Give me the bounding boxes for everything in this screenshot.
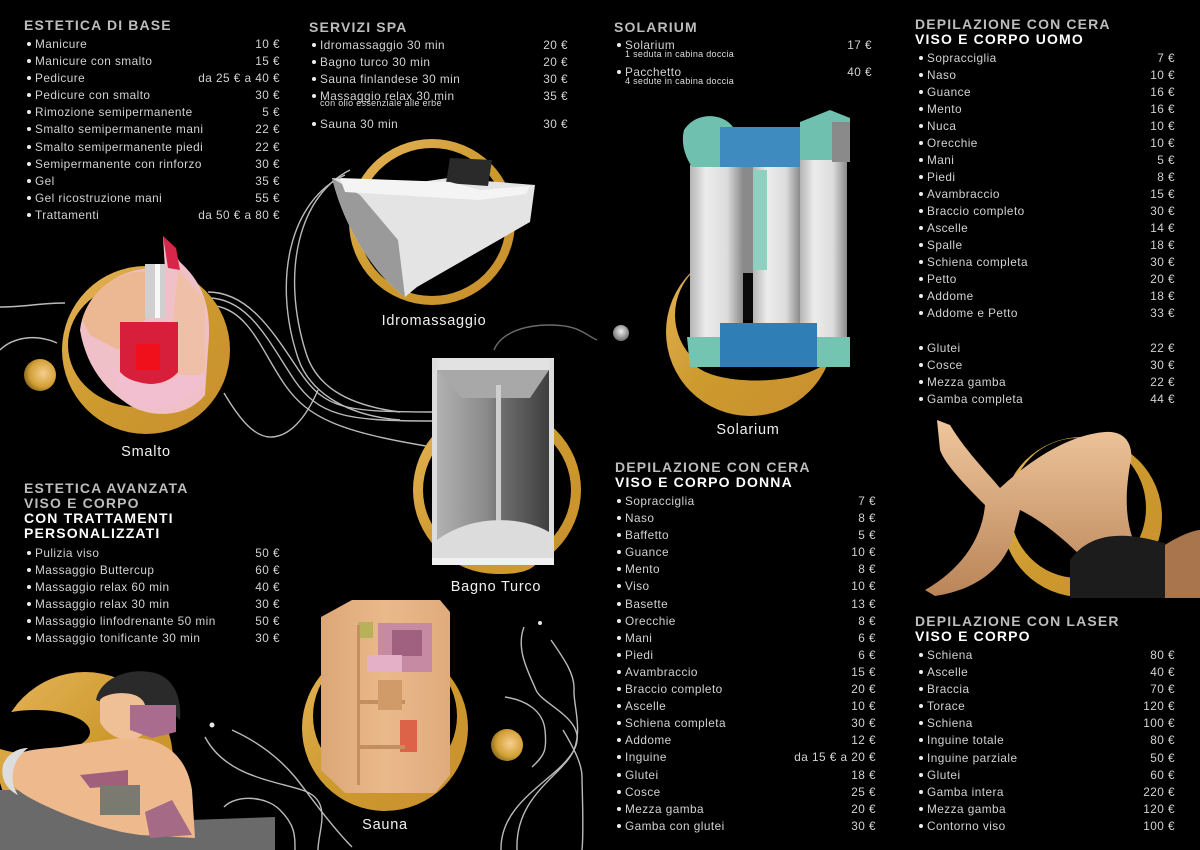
price list: depilazione laser: Schiena (927, 648, 973, 662)
price list: depilazione laser (919, 648, 1175, 833)
price list: depilazione donna: 10 € (851, 545, 876, 559)
price list: servizi spa (312, 38, 568, 131)
price list: depilazione donna: 5 € (858, 528, 876, 542)
price list: depilazione laser: Schiena (927, 716, 973, 730)
price list: servizi spa: 20 € (543, 38, 568, 52)
price list: estetica di base: 15 € (255, 54, 280, 68)
price list: depilazione uomo: Orecchie (927, 136, 978, 150)
image: relaxing woman (0, 671, 275, 850)
price list: depilazione laser: 120 € (1143, 802, 1175, 816)
price list: depilazione uomo: 30 € (1150, 204, 1175, 218)
price list: estetica avanzata: Massaggio Buttercup (35, 563, 154, 577)
caption: Smalto: Smalto (121, 444, 171, 460)
panel: servizi spa (309, 19, 568, 131)
price list: estetica avanzata: 30 € (255, 631, 280, 645)
price list: depilazione donna: Inguine (625, 750, 667, 764)
image: tanning booth (666, 110, 850, 416)
price list: servizi spa: 30 € (543, 117, 568, 131)
price list: depilazione donna: 20 € (851, 802, 876, 816)
heading: depilazione donna (615, 459, 811, 490)
price list: estetica di base: Gel ricostruzione mani (35, 191, 162, 205)
price list: depilazione uomo: Naso (927, 68, 956, 82)
price list: depilazione laser: Contorno viso (927, 819, 1006, 833)
panel: estetica avanzata (24, 480, 280, 645)
price list: estetica di base: Pedicure (35, 71, 85, 85)
price list: solarium: 40 € (847, 65, 872, 79)
price list: depilazione donna: 30 € (851, 819, 876, 833)
caption: Bagno Turco: Bagno Turco (451, 579, 541, 595)
price list: depilazione uomo: 22 € (1150, 341, 1175, 355)
price list: depilazione donna: 30 € (851, 716, 876, 730)
price list: estetica di base: 22 € (255, 140, 280, 154)
price list: servizi spa: Bagno turco 30 min (320, 55, 430, 69)
price list: depilazione donna: Mezza gamba (625, 802, 704, 816)
price list: estetica avanzata: 30 € (255, 597, 280, 611)
caption: Idromassaggio: Idromassaggio (382, 313, 486, 329)
price list: depilazione donna: Mento (625, 562, 660, 576)
price list: solarium (617, 38, 872, 86)
price list: estetica avanzata: Massaggio relax 60 min (35, 580, 169, 594)
price list: depilazione donna: Naso (625, 511, 654, 525)
heading: depilazione uomo: DEPILAZIONE CON CERA (915, 16, 1111, 32)
price list: estetica di base: Manicure con smalto (35, 54, 152, 68)
price list: depilazione uomo: 7 € (1157, 51, 1175, 65)
price list: estetica avanzata: Pulizia viso (35, 546, 99, 560)
icon: gold sphere bottom (491, 729, 523, 761)
heading: depilazione laser: VISO E CORPO (915, 628, 1031, 644)
price list: depilazione uomo: Glutei (927, 341, 961, 355)
price list: depilazione donna: Basette (625, 597, 668, 611)
price list: depilazione uomo: 20 € (1150, 272, 1175, 286)
price list: depilazione uomo: 18 € (1150, 238, 1175, 252)
price list: estetica di base: 30 € (255, 157, 280, 171)
price list: estetica di base: 30 € (255, 88, 280, 102)
price list: depilazione uomo: 10 € (1150, 136, 1175, 150)
image: steam shower (413, 358, 581, 574)
price list: depilazione donna: Sopracciglia (625, 494, 695, 508)
panel: depilazione donna (615, 459, 876, 833)
price list: depilazione uomo: Petto (927, 272, 957, 286)
price list: depilazione uomo: Schiena completa (927, 255, 1028, 269)
price list: depilazione uomo: 16 € (1150, 85, 1175, 99)
price list: depilazione donna: Schiena completa (625, 716, 726, 730)
heading: estetica avanzata: PERSONALIZZATI (24, 525, 160, 541)
price list: depilazione laser: 60 € (1150, 768, 1175, 782)
heading: depilazione uomo: VISO E CORPO UOMO (915, 31, 1084, 47)
price list: depilazione donna: 10 € (851, 579, 876, 593)
heading: estetica avanzata: ESTETICA AVANZATA (24, 480, 188, 496)
image: nail polish hand (62, 236, 230, 434)
price list: depilazione uomo: Guance (927, 85, 971, 99)
price list: depilazione laser: Glutei (927, 768, 961, 782)
price list: solarium: 4 sedute in cabina doccia (625, 76, 734, 86)
heading: solarium: SOLARIUM (614, 19, 698, 35)
price list: depilazione uomo: 10 € (1150, 119, 1175, 133)
price list: estetica avanzata: Massaggio tonificante 30 min (35, 631, 200, 645)
price list: estetica avanzata: Massaggio relax 30 min (35, 597, 169, 611)
price list: estetica avanzata: 40 € (255, 580, 280, 594)
price list: depilazione uomo: Addome (927, 289, 974, 303)
price list: solarium: 17 € (847, 38, 872, 52)
price list: depilazione laser: 40 € (1150, 665, 1175, 679)
price list: estetica avanzata: 50 € (255, 614, 280, 628)
price list: depilazione uomo: 33 € (1150, 306, 1175, 320)
price list: depilazione uomo: 30 € (1150, 358, 1175, 372)
price list: depilazione uomo: 22 € (1150, 375, 1175, 389)
price list: estetica di base (27, 37, 280, 222)
price list: depilazione laser: Torace (927, 699, 965, 713)
price list: depilazione donna: Ascelle (625, 699, 666, 713)
price list: depilazione uomo: Sopracciglia (927, 51, 997, 65)
price list: depilazione laser: Inguine totale (927, 733, 1004, 747)
icon: gold sphere left (24, 359, 56, 391)
price list: solarium: Solarium (625, 38, 675, 52)
price list: depilazione uomo: 44 € (1150, 392, 1175, 406)
price list: depilazione uomo: Avambraccio (927, 187, 1000, 201)
price list: estetica di base: 55 € (255, 191, 280, 205)
heading: depilazione donna: DEPILAZIONE CON CERA (615, 459, 811, 475)
price list: depilazione donna: 8 € (858, 562, 876, 576)
price list: estetica di base: 35 € (255, 174, 280, 188)
price list: depilazione uomo: 5 € (1157, 153, 1175, 167)
price list: estetica avanzata: Massaggio linfodrenante 50 min (35, 614, 216, 628)
panel: solarium (614, 19, 872, 86)
price list: estetica di base: Pedicure con smalto (35, 88, 150, 102)
heading: estetica avanzata (24, 480, 188, 541)
price list: estetica di base: Smalto semipermanente mani (35, 122, 203, 136)
price list: depilazione uomo: Piedi (927, 170, 955, 184)
price list: depilazione laser: Braccia (927, 682, 970, 696)
price list: depilazione uomo: Mani (927, 153, 954, 167)
price list: depilazione uomo: Cosce (927, 358, 963, 372)
image: sauna cabin (302, 600, 468, 811)
price list: depilazione donna: Addome (625, 733, 672, 747)
price list: depilazione donna: Piedi (625, 648, 653, 662)
price list: estetica di base: Smalto semipermanente piedi (35, 140, 203, 154)
price list: estetica di base: Rimozione semipermanente (35, 105, 193, 119)
price list: depilazione uomo: 8 € (1157, 170, 1175, 184)
price list: depilazione donna: 13 € (851, 597, 876, 611)
price list: solarium: 1 seduta in cabina doccia (625, 49, 734, 59)
price list: depilazione uomo: 16 € (1150, 102, 1175, 116)
price list: servizi spa: con olio essenziale alle erbe (320, 98, 442, 108)
price list: depilazione donna: da 15 € a 20 € (794, 750, 876, 764)
price list: depilazione laser: Ascelle (927, 665, 968, 679)
price list: depilazione donna: Cosce (625, 785, 661, 799)
price list: estetica di base: Manicure (35, 37, 87, 51)
price list: depilazione donna: 8 € (858, 614, 876, 628)
price list: depilazione donna: 7 € (858, 494, 876, 508)
price list: depilazione laser: Gamba intera (927, 785, 1004, 799)
price list: depilazione donna: 25 € (851, 785, 876, 799)
price list: depilazione laser: Mezza gamba (927, 802, 1006, 816)
caption: Sauna: Sauna (362, 817, 408, 833)
price list: depilazione donna: 6 € (858, 631, 876, 645)
panel: estetica di base (24, 17, 280, 222)
price list: servizi spa: Massaggio relax 30 min (320, 89, 454, 103)
heading: depilazione laser (915, 613, 1120, 644)
panel: depilazione uomo (915, 16, 1175, 406)
price list: depilazione laser: 80 € (1150, 733, 1175, 747)
price list: depilazione laser: 70 € (1150, 682, 1175, 696)
price list: depilazione donna: Viso (625, 579, 650, 593)
heading: estetica avanzata: CON TRATTAMENTI (24, 510, 174, 526)
price list: depilazione laser: 100 € (1143, 716, 1175, 730)
price list: depilazione uomo (919, 51, 1175, 406)
caption: Solarium: Solarium (716, 422, 780, 438)
heading: depilazione laser: DEPILAZIONE CON LASER (915, 613, 1120, 629)
price list: depilazione donna: 8 € (858, 511, 876, 525)
price list: depilazione laser: 120 € (1143, 699, 1175, 713)
price list: servizi spa: Sauna finlandese 30 min (320, 72, 460, 86)
heading: depilazione uomo (915, 16, 1111, 47)
heading: depilazione donna: VISO E CORPO DONNA (615, 474, 793, 490)
price list: estetica avanzata (27, 546, 280, 645)
price list: depilazione uomo: Spalle (927, 238, 962, 252)
price list: depilazione donna: 12 € (851, 733, 876, 747)
price list: servizi spa: Sauna 30 min (320, 117, 398, 131)
price list: depilazione donna: Mani (625, 631, 652, 645)
price list: depilazione donna: Baffetto (625, 528, 669, 542)
image: waxed legs (925, 420, 1200, 598)
decorative swirl lines (0, 170, 597, 850)
price list: depilazione donna: Avambraccio (625, 665, 698, 679)
price list: depilazione donna: 10 € (851, 699, 876, 713)
price list: depilazione donna: 15 € (851, 665, 876, 679)
price list: depilazione uomo: Nuca (927, 119, 956, 133)
price list: servizi spa: 35 € (543, 89, 568, 103)
price list: depilazione donna: 20 € (851, 682, 876, 696)
price list: estetica di base: 5 € (262, 105, 280, 119)
price list: depilazione uomo: Mezza gamba (927, 375, 1006, 389)
icon: silver sphere (613, 325, 629, 341)
price list: depilazione uomo: 15 € (1150, 187, 1175, 201)
price list: depilazione laser: Inguine parziale (927, 751, 1018, 765)
price list: depilazione laser: 80 € (1150, 648, 1175, 662)
price list: servizi spa: 20 € (543, 55, 568, 69)
price list: estetica di base: Gel (35, 174, 55, 188)
price list: estetica di base: Semipermanente con rinforzo (35, 157, 202, 171)
price list: depilazione donna: 6 € (858, 648, 876, 662)
price list: estetica di base: da 25 € a 40 € (198, 71, 280, 85)
price list: depilazione donna (617, 494, 876, 833)
price list: depilazione donna: Gamba con glutei (625, 819, 725, 833)
price list: depilazione uomo: 18 € (1150, 289, 1175, 303)
price list: depilazione donna: 18 € (851, 768, 876, 782)
price list: depilazione donna: Guance (625, 545, 669, 559)
price list: depilazione uomo: 14 € (1150, 221, 1175, 235)
price list: depilazione uomo: Gamba completa (927, 392, 1023, 406)
heading: estetica avanzata: VISO E CORPO (24, 495, 140, 511)
image: whirlpool tub (332, 139, 535, 305)
price list: depilazione uomo: 10 € (1150, 68, 1175, 82)
price list: depilazione donna: Glutei (625, 768, 659, 782)
price list: depilazione donna: Braccio completo (625, 682, 723, 696)
price list: solarium: Pacchetto (625, 65, 682, 79)
price list: depilazione uomo: 30 € (1150, 255, 1175, 269)
heading: servizi spa: SERVIZI SPA (309, 19, 408, 35)
panel: depilazione laser (915, 613, 1175, 833)
heading: estetica di base: ESTETICA DI BASE (24, 17, 172, 33)
price list: depilazione uomo: Mento (927, 102, 962, 116)
price list: estetica di base: da 50 € a 80 € (198, 208, 280, 222)
price list: estetica avanzata: 50 € (255, 546, 280, 560)
price list: servizi spa: 30 € (543, 72, 568, 86)
price list: estetica avanzata: 60 € (255, 563, 280, 577)
price list: depilazione uomo: Braccio completo (927, 204, 1025, 218)
price list: depilazione uomo: Ascelle (927, 221, 968, 235)
price list: estetica di base: 22 € (255, 122, 280, 136)
price list: depilazione laser: 50 € (1150, 751, 1175, 765)
price list: depilazione donna: Orecchie (625, 614, 676, 628)
price list: depilazione laser: 220 € (1143, 785, 1175, 799)
price list: servizi spa: Idromassaggio 30 min (320, 38, 445, 52)
price list: depilazione laser: 100 € (1143, 819, 1175, 833)
price list: depilazione uomo: Addome e Petto (927, 306, 1018, 320)
price list: estetica di base: 10 € (255, 37, 280, 51)
price list: estetica di base: Trattamenti (35, 208, 99, 222)
